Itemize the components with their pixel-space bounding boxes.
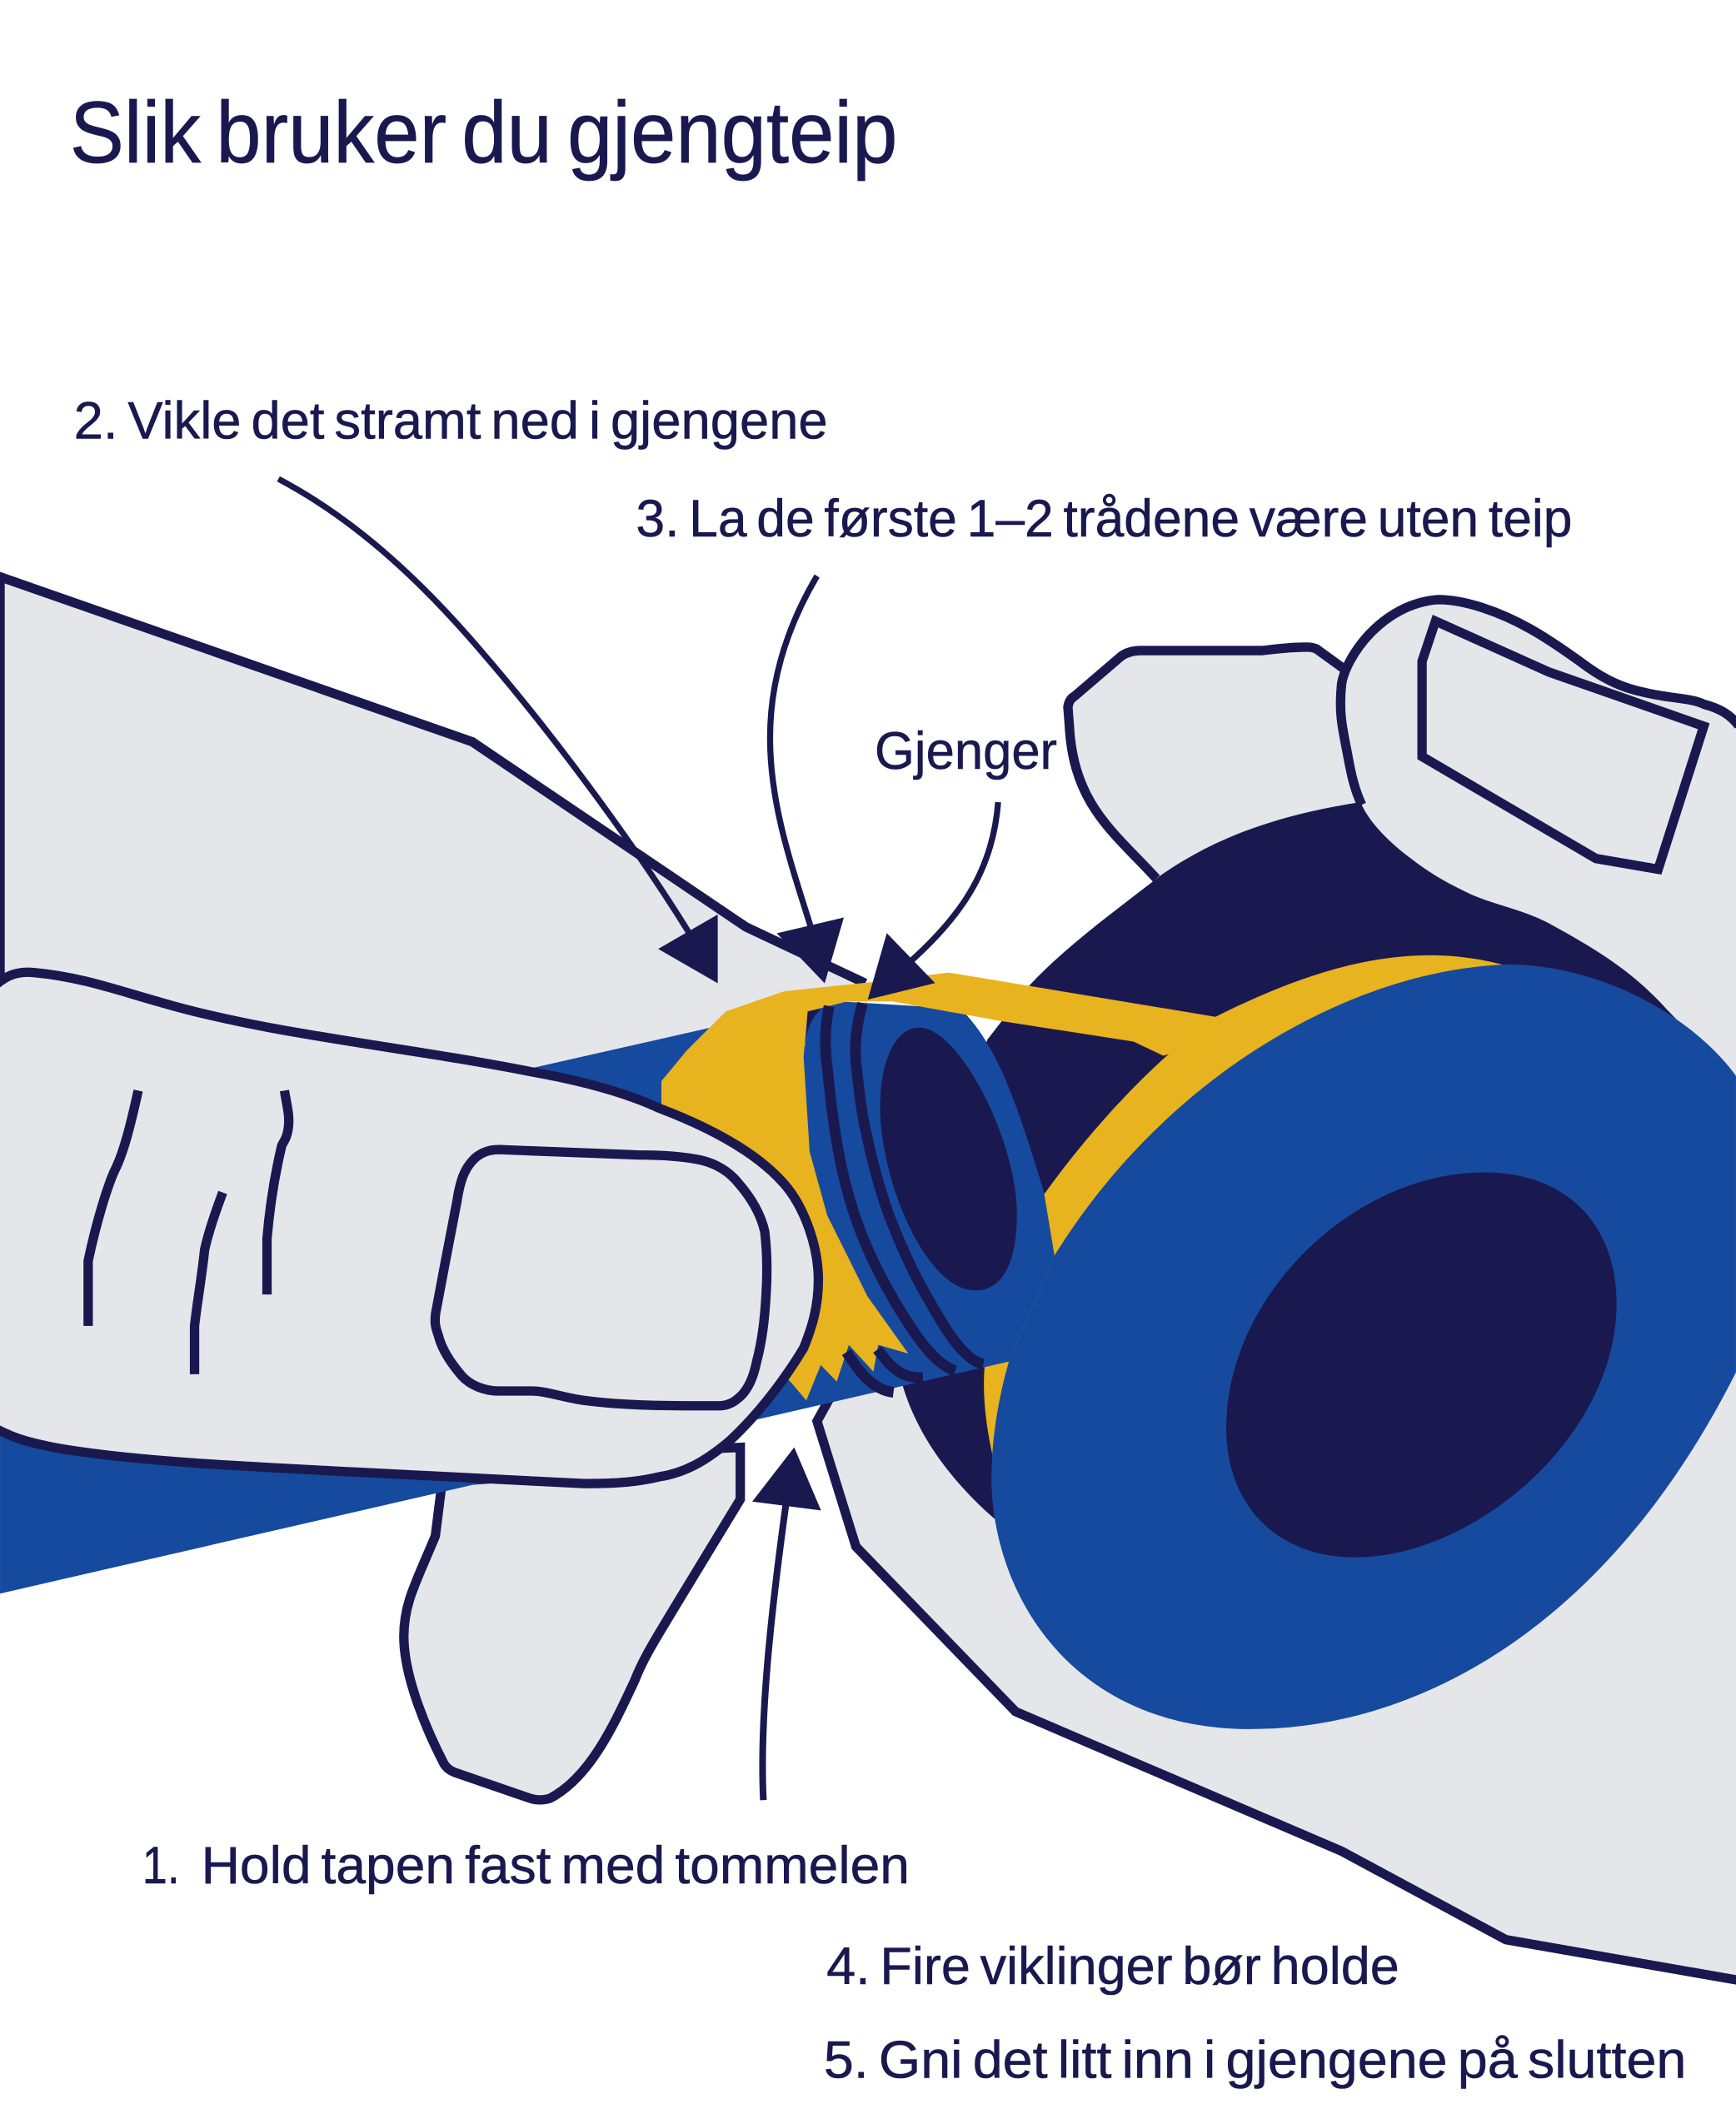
pipe opening: [880, 1028, 1017, 1290]
right hand upper finger: [1068, 647, 1369, 879]
label: step 1: Hold tapen fast med tommelen: [202, 1837, 910, 1895]
title: Slik bruker du gjengteip: [70, 84, 897, 182]
tape roll hole: [1226, 1173, 1617, 1558]
gold tape on roll: [984, 955, 1516, 1462]
right hand palm: [817, 1073, 1736, 1982]
label: step 2: 2. Vikle det stramt ned i gjengene: [74, 392, 828, 451]
left thumb: [0, 972, 818, 1483]
pipe end: [805, 1000, 1055, 1375]
arrow: threads: [868, 802, 998, 1000]
right thumbnail: [1422, 621, 1704, 870]
label: step 3: 3. La de første 1–2 trådene være uten teip: [636, 490, 1572, 548]
label: threads: Gjenger: [875, 722, 1057, 780]
pipe body: [0, 1028, 1009, 1593]
label: step 1: 1.: [142, 1837, 180, 1895]
arrow: step 1: [752, 1448, 821, 1800]
lower finger: [404, 1448, 741, 1800]
thread lines: [826, 1004, 983, 1393]
thumb wrinkles: [88, 1090, 289, 1374]
arrow: step 2: [278, 479, 718, 983]
index finger: [0, 576, 872, 1341]
gold tape wrapped on threads: [661, 973, 1248, 1400]
label: step 4: 4. Fire viklinger bør holde: [826, 1937, 1399, 1996]
pipe corner shadow: [806, 1009, 821, 1035]
tape roll back: [901, 802, 1736, 1610]
tape roll front: [991, 965, 1736, 1729]
right thumb: [1340, 600, 1736, 1084]
label: step 5: 5. Gni det litt inn i gjengene på slutten: [824, 2032, 1686, 2090]
left thumbnail: [435, 1149, 767, 1406]
arrow: step 3: [770, 576, 844, 983]
